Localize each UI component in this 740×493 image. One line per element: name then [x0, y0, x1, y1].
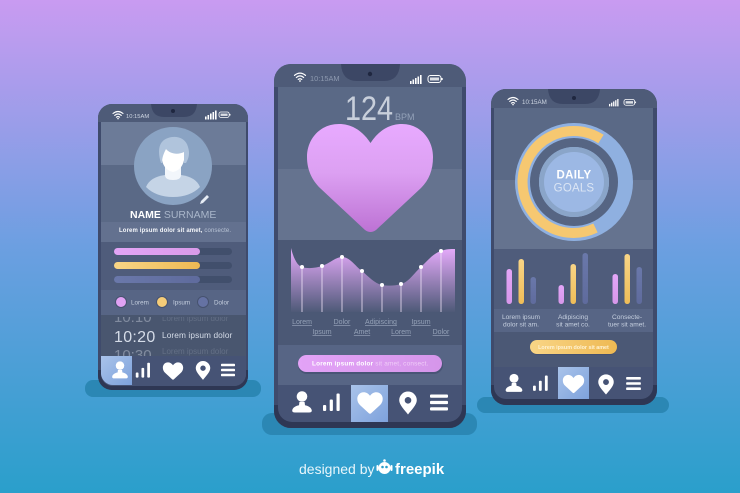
status bar: daily goals phone: 10:15AM	[522, 99, 547, 106]
chart labels: Ipsum	[411, 319, 431, 326]
chart labels: Ipsum	[312, 329, 332, 336]
bar chart captions: tuer sit amet.	[608, 322, 646, 328]
chart labels: Lorem	[391, 329, 411, 336]
icon: large heart	[307, 124, 433, 232]
chart labels: Amet	[354, 329, 370, 336]
chart labels: Dolor	[433, 329, 450, 336]
navigation bar: heart rate phone	[292, 385, 448, 422]
alarm time list: Lorem ipsum dolor	[162, 314, 229, 323]
legend: Ipsum	[173, 300, 190, 306]
chart labels: Lorem	[292, 319, 312, 326]
status bar: profile phone: 10:15AM	[126, 114, 149, 120]
bar chart captions: sit amet co.	[556, 322, 590, 328]
button: yellow: Lorem ipsum dolor sit amet	[538, 345, 609, 351]
status bar: profile phone	[98, 104, 248, 122]
bar chart captions: Lorem ipsum	[502, 314, 541, 321]
alarm time list: 10:20	[114, 329, 156, 346]
navigation bar: daily goals phone	[506, 367, 641, 399]
bar chart captions: Adipiscing	[558, 314, 588, 321]
name heading: NAME SURNAME	[130, 209, 216, 221]
status bar: heart rate phone: 10:15AM	[310, 74, 340, 83]
panel: daily goals phone	[477, 89, 669, 413]
panel: heart rate phone	[262, 64, 477, 435]
legend	[116, 296, 229, 308]
button: pink: Lorem ipsum dolor sit amet, consect.	[312, 360, 429, 368]
bar chart	[506, 253, 642, 304]
icon: freepik logo	[376, 459, 392, 474]
chart labels	[292, 319, 450, 336]
button: yellow	[530, 340, 617, 355]
chart labels: Dolor	[334, 319, 351, 326]
alarm time list	[115, 317, 232, 356]
panel: profile phone	[85, 104, 261, 397]
bar chart captions: dolor sit am.	[503, 322, 539, 328]
alarm time list: Lorem ipsum dolor	[162, 347, 229, 356]
alarm time list: 10:30	[114, 347, 152, 364]
icon: pencil	[200, 195, 209, 204]
donut chart: daily goals: GOALS	[554, 182, 594, 194]
profile caption: Lorem ipsum dolor sit amet, consecte.	[119, 228, 231, 234]
navigation bar: profile phone	[101, 356, 235, 385]
progress bars	[114, 248, 232, 283]
donut chart: daily goals	[515, 123, 633, 241]
bar chart captions	[502, 314, 646, 328]
heart rate value: 124	[345, 90, 393, 128]
button: pink	[298, 355, 443, 374]
legend: Dolor	[214, 300, 229, 306]
avatar	[134, 127, 212, 205]
donut chart: daily goals: DAILY	[557, 170, 591, 182]
alarm time list: Lorem ipsum dolor	[162, 330, 233, 340]
freepik credit: designed by	[299, 461, 375, 477]
status bar: daily goals phone	[491, 89, 657, 108]
freepik credit: freepik	[395, 461, 445, 478]
status bar: heart rate phone	[274, 64, 466, 87]
bpm unit: BPM	[395, 112, 415, 122]
bar chart captions: Consecte-	[612, 314, 642, 321]
legend: Lorem	[131, 300, 149, 306]
area chart	[291, 248, 455, 312]
alarm time list: 10:10	[114, 309, 152, 326]
chart labels: Adipiscing	[365, 319, 397, 326]
freepik credit	[299, 459, 445, 478]
